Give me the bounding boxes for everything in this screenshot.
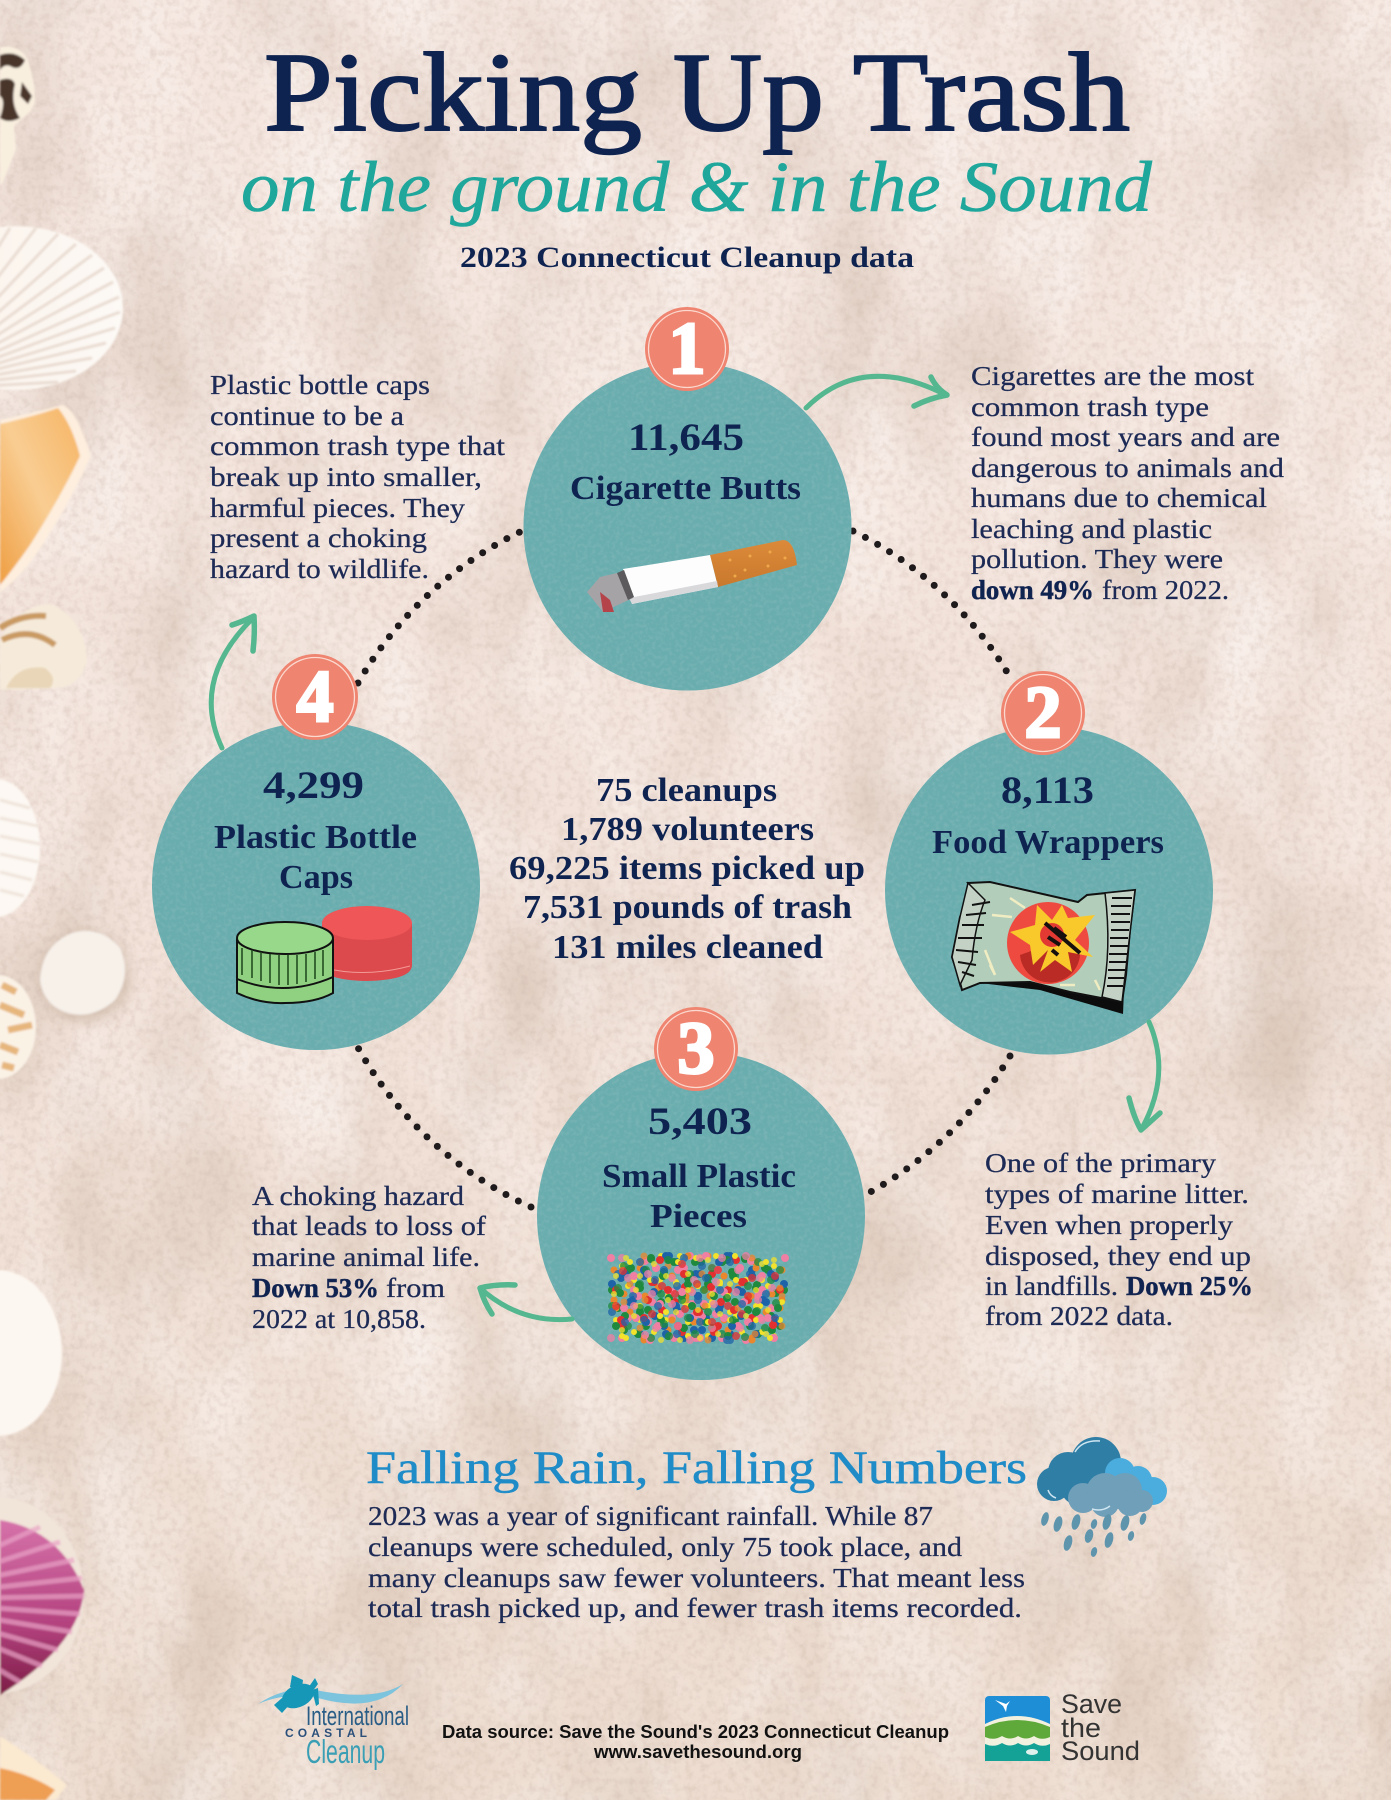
text block: cigarettes note [971, 361, 1285, 605]
text block: cigarettes note: leaching and plastic [971, 514, 1212, 544]
arrow: circle 3 to pieces note [480, 1285, 572, 1320]
text block: plastic pieces note: Down 53% [252, 1273, 379, 1303]
text block: bottle caps note [210, 370, 506, 584]
text block: food wrappers note: from 2022 data. [985, 1301, 1173, 1331]
arrow: circle 2 to wrappers note [1129, 1022, 1160, 1130]
center stats: 1,789 volunteers [561, 811, 814, 848]
text block: falling rain [368, 1501, 1025, 1623]
shell: large white shell [0, 1270, 62, 1436]
badge 4: 4 [296, 656, 334, 738]
text block: cigarettes note: dangerous to animals and [971, 453, 1285, 483]
text block: plastic pieces note [252, 1181, 486, 1334]
text block: food wrappers note [985, 1148, 1253, 1331]
panel: cigarette butts [524, 307, 852, 690]
text block: plastic pieces note: A choking hazard [252, 1181, 465, 1211]
center stats: 131 miles cleaned [552, 929, 823, 966]
text block: food wrappers note: One of the primary [985, 1148, 1217, 1178]
text block: plastic pieces note: marine animal life. [252, 1242, 480, 1272]
icon: rain cloud [1037, 1437, 1167, 1558]
badge 2: 2 [1024, 672, 1062, 754]
dotted ring connecting the circles [356, 531, 1010, 1207]
data source footer [442, 1722, 949, 1762]
circle 1 [524, 362, 852, 690]
text block: plastic pieces note: that leads to loss of [252, 1211, 486, 1241]
label: Plastic Bottle [214, 819, 417, 856]
center stats [509, 772, 865, 966]
text block: cigarettes note: found most years and are [971, 422, 1280, 452]
center stats: 75 cleanups [596, 772, 777, 809]
icon: cigarette [587, 540, 797, 612]
text block: bottle caps note: hazard to wildlife. [210, 554, 429, 584]
logo: International Coastal Cleanup: COASTAL [285, 1726, 367, 1740]
text block: falling rain: 2023 was a year of significant rainfall. While 87 [368, 1501, 933, 1531]
text block: bottle caps note: continue to be a [210, 401, 404, 431]
text block: cigarettes note: pollution. They were [971, 544, 1223, 574]
title: Picking Up Trash [264, 31, 1130, 155]
badge 1 [645, 307, 729, 391]
subtitle: on the ground & in the Sound [241, 147, 1153, 227]
data heading: 2023 Connecticut Cleanup data [460, 241, 914, 274]
text block: cigarettes note: Cigarettes are the most [971, 361, 1255, 391]
text block: food wrappers note: Down 25% [1126, 1271, 1253, 1301]
shell: dark striped top shell [0, 47, 35, 184]
data source footer: www.savethesound.org [593, 1742, 802, 1762]
shell: tan striped shell [0, 975, 36, 1079]
data source footer: Data source: Save the Sound's 2023 Connecticut Cleanup [442, 1722, 949, 1742]
count: 11,645 [628, 416, 744, 459]
count: 5,403 [648, 1100, 752, 1143]
text block: bottle caps note: break up into smaller, [210, 462, 482, 492]
arrow: circle 1 to cigarettes note [806, 376, 947, 408]
logo: Save the Sound: Sound [1061, 1736, 1140, 1766]
heading: falling rain: Falling Rain, Falling Numbers [366, 1442, 1027, 1494]
text block: falling rain: total trash picked up, and fewer trash items recorded. [368, 1593, 1022, 1623]
panel: small plastic pieces [537, 1007, 865, 1380]
text block: cigarettes note: humans due to chemical [971, 483, 1267, 513]
seashells along the left edge [0, 47, 129, 1800]
text block: food wrappers note: types of marine litter. [985, 1179, 1249, 1209]
icon: food wrapper [952, 882, 1135, 1014]
logo: Save the Sound: the [1061, 1713, 1101, 1743]
badge 3: 3 [678, 1008, 714, 1090]
arrow: circle 4 to caps note [211, 616, 254, 748]
shell: spiral shell [0, 604, 87, 690]
shell: purple scallop [0, 1496, 84, 1695]
text block: food wrappers note: disposed, they end up [985, 1241, 1251, 1271]
logo: International Coastal Cleanup [258, 1675, 409, 1770]
text block: cigarettes note: from 2022. [1102, 575, 1229, 605]
shell: orange conch fragment [0, 405, 91, 592]
badge 1: 1 [668, 308, 706, 390]
text block: food wrappers note: in landfills. [985, 1271, 1118, 1301]
badge 3 [654, 1007, 738, 1091]
text block: bottle caps note: present a choking [210, 523, 427, 553]
count: 4,299 [263, 764, 364, 807]
panel: plastic bottle caps [152, 654, 480, 1050]
badge 2 [1001, 671, 1085, 755]
label [602, 1158, 796, 1235]
text block: cigarettes note: down 49% [971, 575, 1094, 605]
shell: white pebble shell [40, 931, 129, 1021]
label: Pieces [650, 1198, 747, 1235]
shell: white scallop [0, 226, 123, 390]
text block: plastic pieces note: 2022 at 10,858. [252, 1304, 426, 1334]
circle 3 [537, 1052, 865, 1380]
text block: falling rain: cleanups were scheduled, only 75 took place, and [368, 1532, 963, 1562]
label: Food Wrappers [932, 824, 1164, 861]
text block: food wrappers note: Even when properly [985, 1210, 1234, 1240]
text block: falling rain: many cleanups saw fewer volunteers. That meant less [368, 1563, 1025, 1593]
text block: bottle caps note: harmful pieces. They [210, 493, 466, 523]
text block: bottle caps note: Plastic bottle caps [210, 370, 430, 400]
center stats: 69,225 items picked up [509, 850, 865, 887]
circle 4 [152, 722, 480, 1050]
count: 8,113 [1001, 769, 1094, 812]
center stats: 7,531 pounds of trash [523, 889, 852, 926]
badge 4 [272, 654, 358, 740]
logo: Save the Sound: Save [1061, 1689, 1122, 1719]
green cap [237, 922, 333, 1003]
red cap [322, 906, 412, 981]
icon: bottle caps [237, 906, 412, 1003]
shell: bottom orange shell [0, 1736, 67, 1800]
label: Caps [279, 859, 353, 896]
logo: International Coastal Cleanup: Cleanup [306, 1733, 385, 1770]
label: Cigarette Butts [570, 470, 801, 507]
circle 2 [885, 726, 1213, 1054]
shell: white ribbed shell [0, 779, 40, 917]
text block: cigarettes note: common trash type [971, 392, 1209, 422]
text block: bottle caps note: common trash type that [210, 431, 506, 461]
logo: Save the Sound [985, 1689, 1140, 1766]
label [214, 819, 417, 896]
panel: food wrappers [885, 671, 1213, 1054]
label: Small Plastic [602, 1158, 796, 1195]
logo: International Coastal Cleanup: International [306, 1701, 409, 1731]
text block: plastic pieces note: from [386, 1273, 445, 1303]
icon: plastic pieces [611, 1256, 785, 1340]
